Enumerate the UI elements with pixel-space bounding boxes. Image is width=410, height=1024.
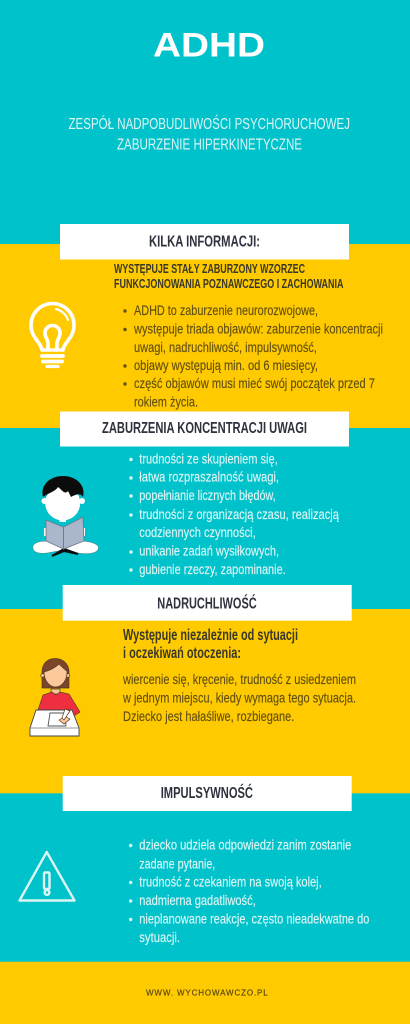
bullet list [129,450,339,577]
bullet list: nadmierna gadatliwość, [139,892,256,908]
bullet list: sytuacji. [139,929,180,945]
bullet list: codziennych czynności, [139,524,256,540]
subtitle [68,114,350,154]
description text [122,671,356,724]
bullet list: rokiem życia. [134,394,198,410]
bullet list: dziecko udziela odpowiedzi zanim zostanie [139,836,351,852]
bold intro: Występuje niezależnie od sytuacji [123,627,298,644]
bullet list [123,302,383,410]
heading bar: zaburzenia koncentracji uwagi [60,412,349,446]
footer [0,962,410,1024]
icon: light bulb [31,304,74,366]
bullet list: łatwa rozpraszalność uwagi, [139,469,279,485]
bullet list: uwagi, nadruchliwość, impulsywność, [134,339,317,355]
description text: Dziecko jest hałaśliwe, rozbiegane. [123,708,294,724]
bullet list: unikanie zadań wysiłkowych, [139,543,279,559]
heading bar: nadruchliwość [63,585,352,621]
heading bar: kilka informacji: KILKA INFORMACJI: [149,234,260,250]
bullet list [129,836,369,945]
bullet list: trudności z organizacją czasu, realizacją [139,506,339,522]
panel: zaburzenia koncentracji uwagi [33,450,339,577]
bullet list: objawy występują min. od 6 miesięcy, [134,357,318,373]
bold intro: i oczekiwań otoczenia: [123,645,241,662]
panel: nadruchliwość [0,609,410,793]
icon: warning triangle [20,852,74,900]
bullet list: trudności ze skupieniem się, [139,450,278,466]
bold intro [123,627,298,662]
bullet list: gubienie rzeczy, zapominanie. [139,561,286,577]
bold intro [114,262,344,291]
icon: girl writing at a desk [30,658,80,736]
panel: kilka informacji [0,244,410,428]
heading bar: nadruchliwość: NADRUCHLIWOŚĆ [157,593,257,612]
bullet list: zadane pytanie, [139,855,215,871]
heading bar: impulsywność [63,776,352,811]
subtitle: ZABURZENIE HIPERKINETYCZNE [117,136,302,154]
bullet list: ADHD to zaburzenie neurorozwojowe, [134,302,318,318]
title: ADHD [153,26,265,64]
icon: child reading a book [33,476,98,556]
bullet list: trudność z czekaniem na swoją kolej, [139,874,322,890]
panel: impulsywność [20,836,369,945]
footer: WWW. WYCHOWAWCZO.PL [146,988,268,997]
heading bar: kilka informacji [60,224,349,260]
bold intro: WYSTĘPUJE STAŁY ZABURZONY WZORZEC [114,262,305,276]
header [68,26,350,154]
bullet list: popełnianie licznych błędów, [139,487,276,503]
heading bar: impulsywność: IMPULSYWNOŚĆ [161,783,253,802]
heading bar: zaburzenia koncentracji uwagi: ZABURZENIA KONCENTRACJI UWAGI [102,420,307,437]
